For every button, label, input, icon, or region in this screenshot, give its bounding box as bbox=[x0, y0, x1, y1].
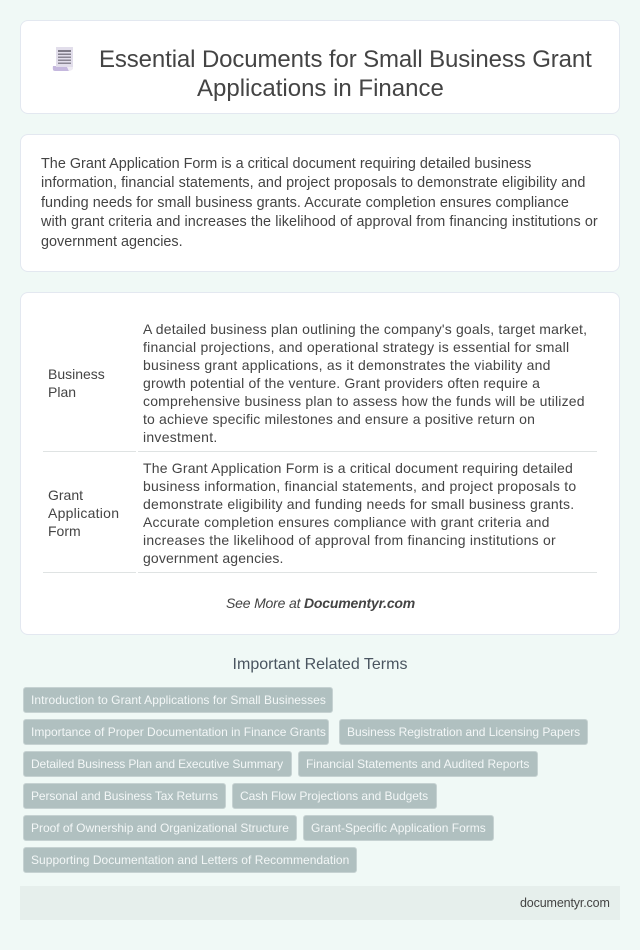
tags: related terms: Supporting Documentation and Letters of Recommendation bbox=[31, 853, 349, 867]
tags: related terms: Personal and Business Tax Returns bbox=[31, 789, 218, 803]
table text: Business Plan description: growth potential of the venture. Grant providers often require a bbox=[143, 375, 540, 391]
tags: related terms: Detailed Business Plan and Executive Summary bbox=[31, 757, 283, 771]
panel: introduction bbox=[20, 134, 620, 272]
text: introduction paragraph bbox=[41, 156, 598, 250]
table label: Grant Application Form: Application bbox=[48, 505, 119, 521]
table text: Grant Application Form description: government agencies. bbox=[143, 550, 284, 566]
table text: Grant Application Form description bbox=[143, 460, 576, 566]
table label: Business Plan: Plan bbox=[48, 384, 76, 400]
text: introduction paragraph: The Grant Application Form is a critical document requiring detailed business bbox=[41, 156, 531, 172]
footer text: documentyr.com bbox=[520, 896, 610, 910]
tags: related terms: Introduction to Grant Applications for Small Businesses bbox=[31, 693, 326, 707]
tags: related terms: Proof of Ownership and Organizational Structure bbox=[31, 821, 289, 835]
icon: document scroll bbox=[52, 47, 73, 71]
tags: related terms: Financial Statements and Audited Reports bbox=[306, 757, 529, 771]
table label: Grant Application Form: Grant bbox=[48, 487, 83, 503]
footer bbox=[20, 886, 620, 920]
table text: Business Plan description: financial projections, and operational strategy is essential for small bbox=[143, 339, 569, 355]
table text: Business Plan description: to achieve specific milestones and ensure a positive return on bbox=[143, 411, 535, 427]
table label: Business Plan: Business bbox=[48, 366, 105, 382]
title: Essential Documents for Small Business Grant bbox=[99, 46, 592, 73]
see more link: See More at Documentyr.com bbox=[226, 595, 415, 611]
panel: documents table bbox=[20, 292, 620, 635]
table label: Grant Application Form: Form bbox=[48, 523, 81, 539]
tags: related terms: Cash Flow Projections and Budgets bbox=[240, 789, 428, 803]
table text: Grant Application Form description: demonstrate eligibility and funding needs for small business grants. bbox=[143, 496, 574, 512]
title bbox=[99, 46, 592, 102]
heading: important related terms: Important Related Terms bbox=[233, 656, 407, 673]
text: introduction paragraph: information, financial statements, and project proposals to demonstrate eligibility and bbox=[41, 175, 585, 191]
table text: Business Plan description: business grant applications, as it demonstrates the viability and bbox=[143, 357, 551, 373]
panel: title card bbox=[20, 20, 620, 114]
tags: related terms bbox=[23, 687, 588, 873]
table text: Grant Application Form description: increases the likelihood of approval from financing institutions or bbox=[143, 532, 556, 548]
table text: Business Plan description: comprehensive business plan to assess how the funds will be utilized bbox=[143, 393, 585, 409]
table text: Grant Application Form description: business information, financial statements, and project proposals to bbox=[143, 478, 576, 494]
table text: Business Plan description: investment. bbox=[143, 429, 218, 445]
table text: Grant Application Form description: Accurate completion ensures compliance with grant criteria and bbox=[143, 514, 550, 530]
table label: Grant Application Form bbox=[48, 487, 119, 539]
table text: Grant Application Form description: The Grant Application Form is a critical document requiring detailed bbox=[143, 460, 573, 476]
tags: related terms: Importance of Proper Documentation in Finance Grants bbox=[31, 725, 326, 739]
text: introduction paragraph: with grant criteria and increases the likelihood of approval from financing institutions or bbox=[41, 214, 598, 230]
text: introduction paragraph: government agencies. bbox=[41, 234, 183, 250]
title: Applications in Finance bbox=[197, 75, 444, 102]
table text: Business Plan description: A detailed business plan outlining the company's goals, target market, bbox=[143, 321, 587, 337]
tags: related terms: Business Registration and Licensing Papers bbox=[347, 725, 580, 739]
tags: related terms: Grant-Specific Application Forms bbox=[311, 821, 486, 835]
text: introduction paragraph: funding needs for small business grants. Accurate completion ensures compliance bbox=[41, 195, 569, 211]
table label: Business Plan bbox=[48, 366, 105, 400]
table text: Business Plan description bbox=[143, 321, 587, 445]
